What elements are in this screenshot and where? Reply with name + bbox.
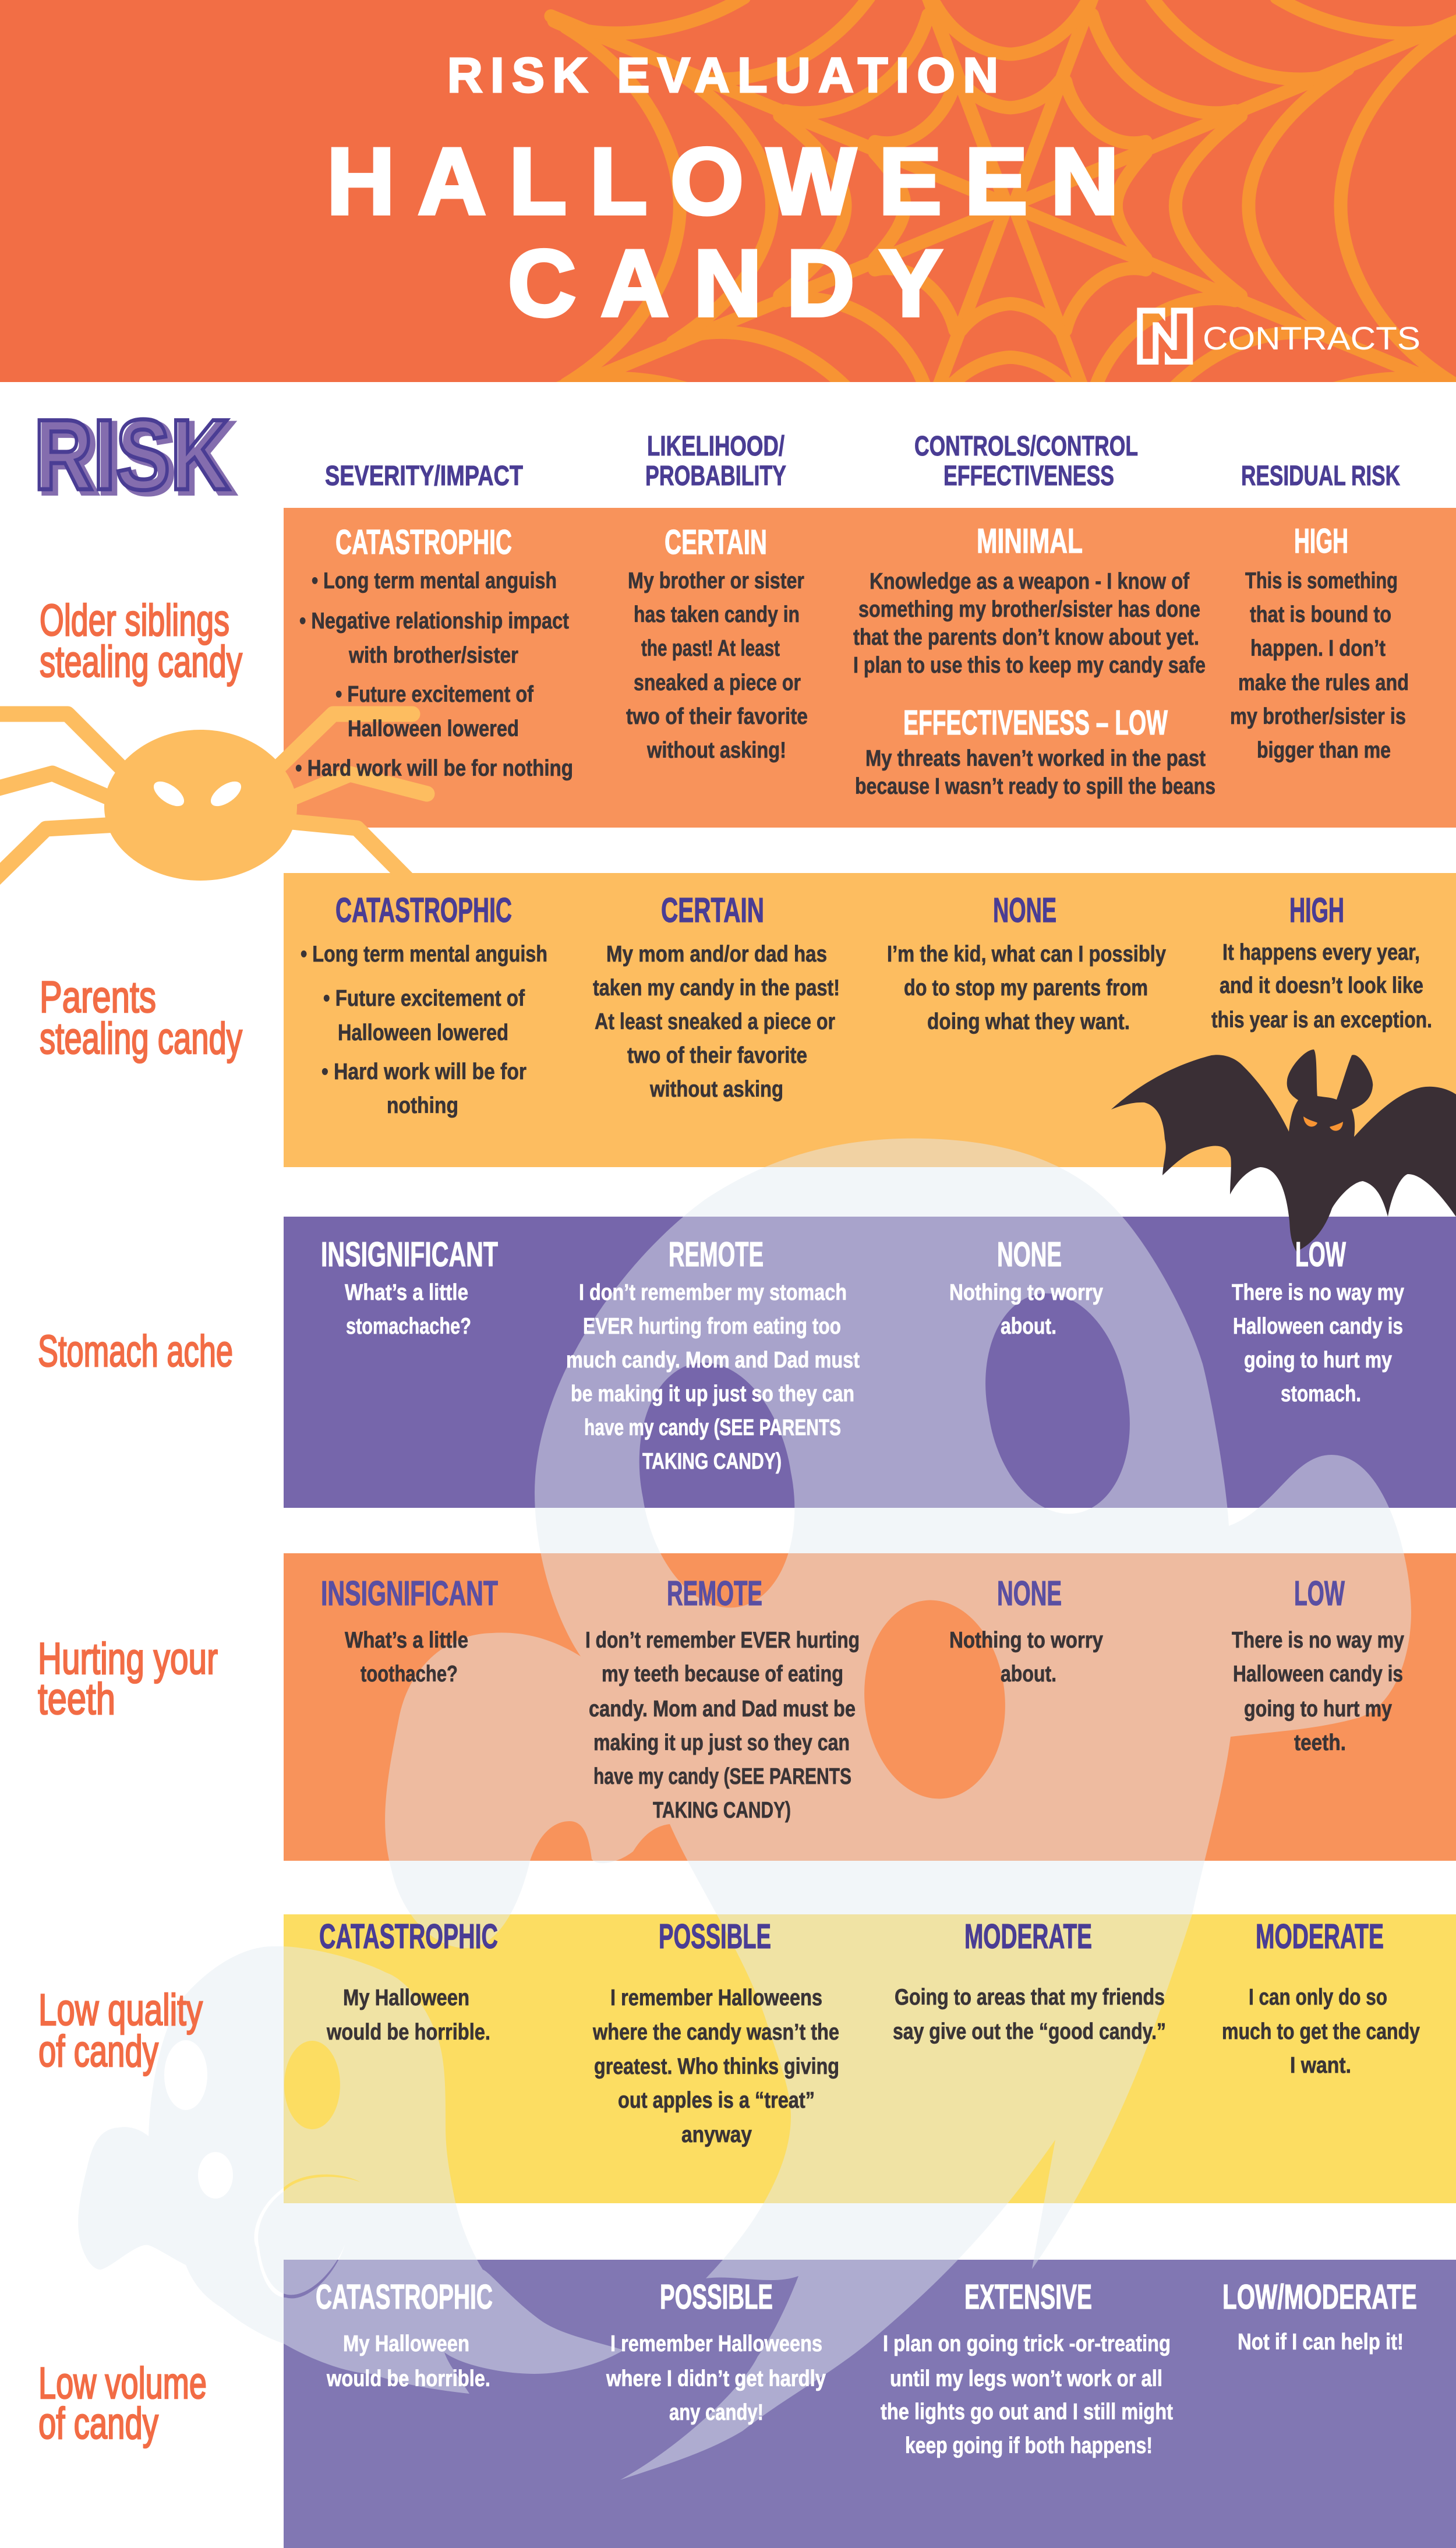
row label [40, 596, 242, 687]
column headings: RESIDUAL RISK [1241, 461, 1400, 492]
controls cell: NONE [997, 1574, 1062, 1613]
title: risk evaluation: RISK EVALUATION [447, 48, 998, 103]
likelihood cell [593, 891, 840, 1102]
severity cell: CATASTROPHIC [335, 523, 512, 561]
icon: small ghost [78, 1946, 624, 2394]
controls cell: Nothing to worry [949, 1280, 1103, 1305]
likelihood cell: where the candy wasn’t the [592, 2020, 839, 2045]
likelihood cell: TAKING CANDY) [653, 1798, 791, 1823]
row label: Hurting your [38, 1634, 218, 1684]
title: halloween candy: CANDY [508, 231, 942, 336]
likelihood cell: TAKING CANDY) [642, 1449, 782, 1474]
controls cell [853, 522, 1215, 799]
controls cell: I’m the kid, what can I possibly [887, 942, 1166, 967]
severity cell: INSIGNIFICANT [321, 1235, 498, 1274]
severity cell: My Halloween [343, 1985, 469, 2010]
residual risk cell: I can only do so [1249, 1985, 1387, 2010]
likelihood cell: have my candy (SEE PARENTS [593, 1764, 851, 1789]
likelihood cell: EVER hurting from eating too [583, 1314, 841, 1339]
likelihood cell: making it up just so they can [593, 1730, 850, 1755]
controls cell: Nothing to worry [949, 1628, 1103, 1653]
row label [38, 2359, 207, 2448]
spider web decoration [551, 0, 1456, 414]
controls cell [949, 1574, 1103, 1687]
severity cell: would be horrible. [326, 2366, 490, 2391]
logo: n contracts: CONTRACTS [1203, 320, 1420, 356]
severity cell: • Negative relationship impact [299, 609, 569, 634]
residual risk cell: This is something [1245, 568, 1398, 593]
row 3: stomach ache [38, 1235, 1404, 1474]
likelihood cell [585, 1574, 860, 1823]
controls cell: Knowledge as a weapon - I know of [870, 569, 1190, 594]
row label: Older siblings [40, 596, 229, 645]
column headings: SEVERITY/IMPACT [325, 461, 523, 492]
controls cell: do to stop my parents from [904, 976, 1148, 1001]
title: halloween candy [327, 129, 1119, 336]
likelihood cell: I don’t remember my stomach [579, 1280, 847, 1305]
row 2: parents stealing candy [40, 891, 1432, 1118]
likelihood cell: REMOTE [669, 1235, 764, 1274]
column headings: CONTROLS/CONTROL [914, 431, 1138, 462]
logo word: risk: RISK [38, 402, 234, 514]
controls cell: that the parents don’t know about yet. [853, 625, 1199, 650]
row label: Parents [40, 973, 156, 1022]
residual risk cell [1230, 522, 1409, 763]
controls cell: something my brother/sister has done [858, 597, 1200, 622]
likelihood cell [626, 523, 808, 763]
likelihood cell: without asking [649, 1077, 783, 1102]
residual risk cell: LOW [1294, 1574, 1345, 1613]
column headings: EFFECTIVENESS [943, 461, 1114, 492]
column headings: LIKELIHOOD/ [647, 431, 784, 462]
icon: large ghost [385, 1139, 1411, 2480]
row label [38, 1985, 203, 2076]
likelihood cell: I remember Halloweens [610, 2331, 822, 2356]
severity cell [321, 1235, 498, 1339]
controls cell: I plan on going trick -or-treating [883, 2331, 1171, 2356]
row label: stealing candy [40, 1014, 242, 1063]
row label: of candy [38, 2399, 158, 2448]
residual risk cell: MODERATE [1256, 1917, 1384, 1956]
severity cell: with brother/sister [348, 643, 518, 668]
controls cell: My threats haven’t worked in the past [865, 746, 1206, 771]
severity cell: • Long term mental anguish [301, 942, 547, 967]
column headings [325, 431, 1400, 492]
residual risk cell: HIGH [1289, 891, 1344, 930]
severity cell: • Long term mental anguish [312, 568, 557, 593]
likelihood cell: candy. Mom and Dad must be [589, 1697, 856, 1722]
severity cell: • Future excitement of [323, 986, 525, 1011]
row label [38, 1634, 218, 1724]
likelihood cell: any candy! [669, 2400, 764, 2425]
likelihood cell: sneaked a piece or [634, 670, 801, 695]
controls cell: I plan to use this to keep my candy safe [853, 653, 1206, 678]
icon: bat [1111, 1049, 1456, 1252]
severity cell [316, 2278, 493, 2391]
severity cell: INSIGNIFICANT [321, 1574, 498, 1613]
likelihood cell: At least sneaked a piece or [595, 1009, 835, 1034]
residual risk cell: Halloween candy is [1233, 1662, 1403, 1687]
likelihood cell: out apples is a “treat” [618, 2088, 815, 2113]
residual risk cell: that is bound to [1250, 602, 1391, 627]
controls cell: about. [1001, 1314, 1056, 1339]
residual risk cell: happen. I don’t [1250, 636, 1386, 661]
severity cell: What’s a little [345, 1628, 468, 1653]
likelihood cell: the past! At least [641, 636, 780, 661]
likelihood cell: two of their favorite [626, 704, 808, 729]
controls cell [949, 1235, 1103, 1339]
row 6: low volume of candy [38, 2278, 1417, 2458]
row 4: hurting your teeth [38, 1574, 1404, 1823]
residual risk cell [1232, 1574, 1404, 1755]
likelihood cell: CERTAIN [661, 891, 764, 930]
logo word: risk: RISK [34, 399, 229, 511]
severity cell: My Halloween [343, 2331, 469, 2356]
residual risk cell: There is no way my [1232, 1628, 1404, 1653]
likelihood cell: POSSIBLE [660, 2278, 773, 2316]
residual risk cell [1222, 1917, 1420, 2078]
residual risk cell: stomach. [1281, 1381, 1361, 1406]
controls cell: until my legs won’t work or all [890, 2366, 1162, 2391]
residual risk cell: LOW [1295, 1235, 1346, 1274]
row 1: older siblings stealing candy [40, 522, 1409, 799]
severity cell: stomachache? [346, 1314, 471, 1339]
likelihood cell: much candy. Mom and Dad must [566, 1348, 860, 1373]
severity cell: CATASTROPHIC [316, 2278, 493, 2316]
header banner [0, 0, 1456, 414]
likelihood cell: has taken candy in [634, 602, 800, 627]
controls cell: doing what they want. [927, 1009, 1130, 1034]
row label: Low quality [38, 1985, 203, 2035]
likelihood cell: my teeth because of eating [602, 1662, 843, 1687]
residual risk cell: much to get the candy [1222, 2019, 1420, 2044]
residual risk cell: It happens every year, [1222, 940, 1420, 965]
column headings: PROBABILITY [645, 461, 786, 492]
likelihood cell: I don’t remember EVER hurting [585, 1628, 860, 1653]
likelihood cell: without asking! [646, 738, 786, 763]
severity cell: CATASTROPHIC [319, 1917, 498, 1956]
severity cell: Halloween lowered [348, 716, 519, 741]
severity cell [321, 1574, 498, 1687]
row label: stealing candy [40, 637, 242, 687]
likelihood cell: have my candy (SEE PARENTS [584, 1415, 841, 1440]
controls cell: NONE [993, 891, 1056, 930]
residual risk cell: my brother/sister is [1230, 704, 1406, 729]
severity cell: • Future excitement of [335, 682, 534, 707]
likelihood cell: REMOTE [667, 1574, 762, 1613]
likelihood cell: CERTAIN [665, 523, 767, 561]
residual risk cell: Halloween candy is [1233, 1314, 1403, 1339]
residual risk cell: teeth. [1294, 1730, 1346, 1755]
controls cell: about. [1001, 1662, 1056, 1687]
controls cell: MODERATE [964, 1917, 1092, 1956]
icon: spider [0, 714, 427, 885]
residual risk cell: going to hurt my [1244, 1697, 1392, 1722]
severity cell [295, 523, 573, 781]
row label: Stomach ache [38, 1327, 233, 1376]
likelihood cell: POSSIBLE [659, 1917, 771, 1956]
severity cell [301, 891, 547, 1118]
residual risk cell: HIGH [1294, 522, 1348, 560]
residual risk cell [1232, 1235, 1404, 1406]
likelihood cell: I remember Halloweens [610, 1985, 822, 2010]
controls cell: EFFECTIVENESS – LOW [903, 704, 1168, 742]
residual risk cell [1222, 2278, 1417, 2355]
severity cell: nothing [387, 1093, 458, 1118]
likelihood cell: My brother or sister [628, 568, 804, 593]
likelihood cell: where I didn’t get hardly [606, 2366, 826, 2391]
title: halloween candy: HALLOWEEN [327, 129, 1119, 234]
residual risk cell: Not if I can help it! [1238, 2330, 1404, 2355]
controls cell: say give out the “good candy.” [893, 2019, 1166, 2044]
residual risk cell: There is no way my [1232, 1280, 1404, 1305]
likelihood cell: greatest. Who thinks giving [594, 2054, 839, 2079]
residual risk cell: make the rules and [1238, 670, 1409, 695]
severity cell: What’s a little [345, 1280, 468, 1305]
row label [40, 973, 242, 1063]
severity cell: • Hard work will be for [321, 1059, 526, 1084]
row 5: low quality of candy [38, 1917, 1420, 2147]
controls cell: keep going if both happens! [905, 2433, 1153, 2458]
likelihood cell [592, 1917, 839, 2147]
controls cell: NONE [997, 1235, 1062, 1274]
likelihood cell: taken my candy in the past! [593, 976, 840, 1001]
row label: teeth [38, 1674, 115, 1724]
severity cell: would be horrible. [326, 2020, 490, 2045]
likelihood cell: anyway [681, 2122, 752, 2147]
severity cell [319, 1917, 498, 2045]
panel backgrounds [284, 508, 1456, 2548]
severity cell: toothache? [361, 1662, 458, 1687]
controls cell: Going to areas that my friends [895, 1985, 1165, 2010]
controls cell: because I wasn’t ready to spill the beans [855, 774, 1215, 799]
likelihood cell: be making it up just so they can [571, 1381, 854, 1406]
residual risk cell: I want. [1290, 2053, 1351, 2078]
row label: of candy [38, 2027, 158, 2076]
residual risk cell: going to hurt my [1244, 1348, 1392, 1373]
controls cell [887, 891, 1166, 1034]
controls cell: MINIMAL [977, 522, 1083, 560]
likelihood cell: My mom and/or dad has [606, 942, 827, 967]
row label: Low volume [38, 2359, 207, 2408]
residual risk cell [1211, 891, 1432, 1033]
likelihood cell [606, 2278, 826, 2425]
controls cell [881, 2278, 1173, 2458]
controls cell: EXTENSIVE [964, 2278, 1092, 2316]
controls cell: the lights go out and I still might [881, 2399, 1173, 2425]
controls cell [893, 1917, 1166, 2044]
severity cell: CATASTROPHIC [335, 891, 512, 930]
logo: n contracts [1137, 308, 1420, 365]
severity cell: • Hard work will be for nothing [295, 756, 573, 781]
residual risk cell: bigger than me [1257, 738, 1391, 763]
likelihood cell [566, 1235, 860, 1474]
severity cell: Halloween lowered [338, 1020, 508, 1045]
likelihood cell: two of their favorite [627, 1043, 807, 1068]
